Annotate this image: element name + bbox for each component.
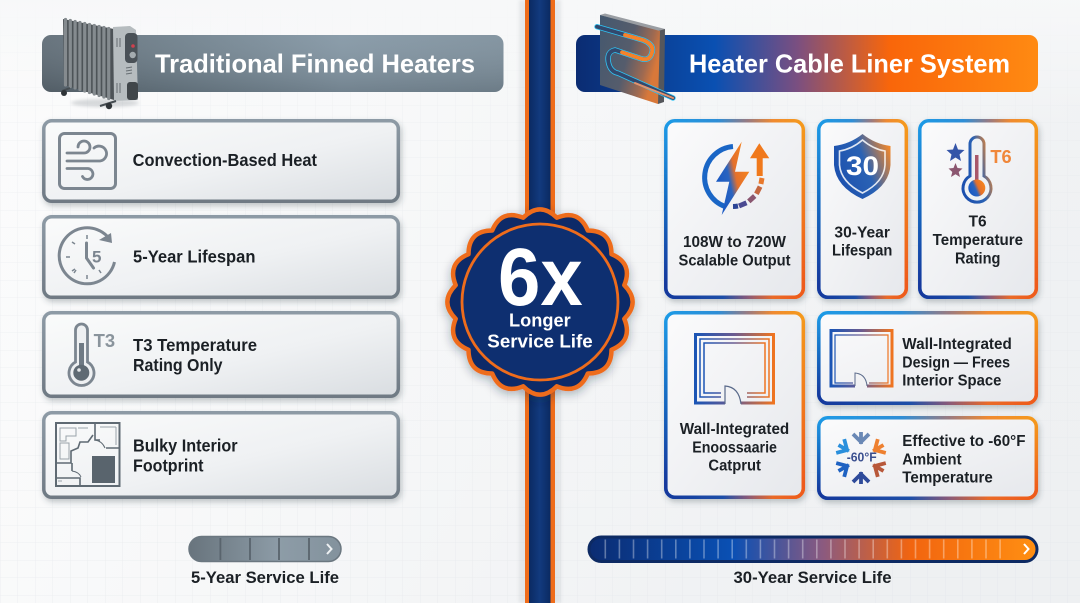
lifespan bar: 30 years [589,537,1037,562]
icon: oil-filled finned heater [61,19,139,109]
icon: chevron [1024,544,1028,554]
feature card: wall-integrated output [666,313,803,497]
feature card: wall-integrated output: Wall-Integrated [680,421,789,438]
feature card: convection-based heat: Convection-Based Heat [133,150,317,170]
panel: heater cable liner system [576,14,1038,587]
feature card: 30-year lifespan [819,121,906,297]
header bar: traditional [42,35,504,92]
feature card: T6 temperature rating: T6 [969,214,987,231]
icon: heater cable panel [597,14,673,104]
header bar: heater cable liner: Heater Cable Liner System [689,48,1010,78]
header bar: traditional: Traditional Finned Heaters [155,48,475,78]
feature card: scalable output: 108W to 720W [683,234,786,251]
feature card: wall-integrated design: Design — Frees [902,354,1010,371]
icon: T3 thermometer [69,324,115,385]
feature card: 30-year lifespan: 30-Year [834,224,890,241]
feature card: bulky interior footprint: Footprint [133,456,204,476]
icon: clock with arrow: 5 [92,248,101,266]
feature card: T3 temperature rating: Rating Only [133,355,223,375]
icon: room outline with wall cable [696,334,774,404]
badge: 6x longer service life: 6x [498,232,583,323]
icon: wind in a square [60,134,116,188]
badge: 6x longer service life [447,209,633,395]
icon: clock with arrow [59,228,114,284]
label: 30-year service life: 30-Year Service Life [734,568,892,587]
lifespan bar: 5 years [189,536,341,562]
icon: shield with 30 [834,134,890,199]
feature card: T6 temperature rating [920,121,1036,297]
badge: 6x longer service life: Service Life [487,330,593,351]
feature card: T3 temperature rating: T3 Temperature [133,335,257,355]
feature card: 5-year lifespan [44,217,398,297]
label: 5-year service life: 5-Year Service Life [191,568,339,587]
icon: T6 thermometer with stars [946,137,1012,202]
icon: T3 thermometer: T3 [94,331,115,351]
feature card: T6 temperature rating: Temperature [933,232,1023,249]
feature card: scalable output [666,121,803,297]
feature card: 5-year lifespan: 5-Year Lifespan [133,247,256,267]
icon: floor plan with bulky unit [56,423,120,486]
icon: snowflake with -60°F: -60°F [847,451,877,465]
feature card: effective to -60°F: Effective to -60°F [902,433,1026,450]
feature card: wall-integrated design: Wall-Integrated [902,336,1012,353]
feature card: effective to -60°F: Temperature [902,470,993,487]
feature card: effective to -60°F [819,418,1036,498]
center divider strip [519,0,561,603]
icon: bolt with rising arrow [705,142,769,215]
icon: room outline small [831,330,892,386]
feature card: 30-year lifespan: Lifespan [832,243,892,260]
panel: traditional finned heaters [42,19,504,587]
feature card: bulky interior footprint: Bulky Interior [133,436,238,456]
feature card: bulky interior footprint [44,413,398,497]
feature card: wall-integrated design [819,313,1036,403]
feature card: T3 temperature rating [44,313,398,396]
feature card: wall-integrated output: Catprut [708,458,761,475]
icon: snowflake with -60°F [834,432,888,484]
feature card: effective to -60°F: Ambient [902,451,962,468]
header bar: heater cable liner [576,35,1038,92]
icon: chevron [327,544,332,554]
feature card: wall-integrated output: Enoossaarie [692,439,777,456]
feature card: convection-based heat [44,121,398,201]
badge: 6x longer service life: Longer [509,310,571,331]
icon: T6 thermometer with stars: T6 [990,147,1012,167]
feature card: T6 temperature rating: Rating [955,250,1000,267]
feature card: wall-integrated design: Interior Space [902,373,1002,390]
icon: shield with 30: 30 [846,151,879,181]
feature card: scalable output: Scalable Output [678,253,790,270]
